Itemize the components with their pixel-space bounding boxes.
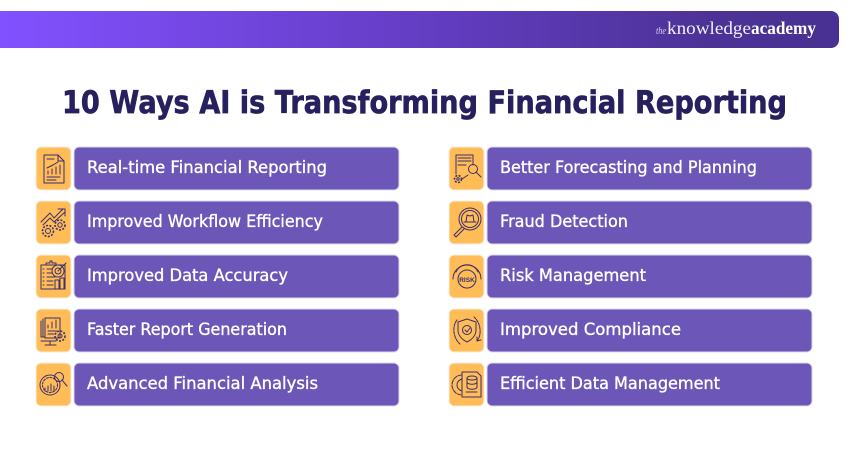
item: Efficient Data Management: Efficient Data Management xyxy=(500,374,721,393)
item: Improved Compliance xyxy=(449,309,812,352)
icon: risk dial: RISK xyxy=(459,277,475,284)
item: Real-time Financial Reporting: Real-time Financial Reporting xyxy=(87,158,327,177)
icon: report on monitor with gear xyxy=(41,318,65,345)
icon: financial document xyxy=(44,155,64,183)
item: Faster Report Generation xyxy=(36,309,399,352)
item: Advanced Financial Analysis xyxy=(36,363,399,406)
item: Better Forecasting and Planning xyxy=(449,147,812,190)
icon: clipboard with target xyxy=(41,261,66,289)
icon: database document with gear xyxy=(452,372,481,397)
item: Improved Data Accuracy xyxy=(36,255,399,298)
icon: rising arrow and gears xyxy=(41,209,65,236)
item: Improved Data Accuracy: Improved Data Accuracy xyxy=(87,266,288,285)
item: Better Forecasting and Planning: Better Forecasting and Planning xyxy=(500,158,757,177)
item: Risk Management xyxy=(449,255,812,298)
logo: the knowledge academy: academy xyxy=(751,18,816,38)
logo: the knowledge academy: knowledge xyxy=(667,18,751,38)
icon: risk dial xyxy=(453,265,481,288)
item: Improved Workflow Efficiency: Improved Workflow Efficiency xyxy=(87,212,323,231)
item: Risk Management: Risk Management xyxy=(500,266,647,285)
item: Efficient Data Management xyxy=(449,363,812,406)
icon: shield with check xyxy=(454,317,481,344)
item: Faster Report Generation: Faster Report Generation xyxy=(87,320,287,339)
icon: magnifier with hat xyxy=(454,208,481,237)
item: Improved Compliance: Improved Compliance xyxy=(500,320,681,339)
item: Advanced Financial Analysis: Advanced Financial Analysis xyxy=(87,374,318,393)
item: Fraud Detection xyxy=(449,201,812,244)
item: Improved Workflow Efficiency xyxy=(36,201,399,244)
header banner xyxy=(0,11,839,48)
logo: the knowledge academy: the xyxy=(656,25,666,37)
icon: chart in circle with magnifier xyxy=(40,372,67,395)
item: Real-time Financial Reporting xyxy=(36,147,399,190)
logo: the knowledge academy xyxy=(656,18,816,38)
icon: report, magnifier and gear xyxy=(454,155,481,182)
item: Fraud Detection: Fraud Detection xyxy=(500,212,628,231)
